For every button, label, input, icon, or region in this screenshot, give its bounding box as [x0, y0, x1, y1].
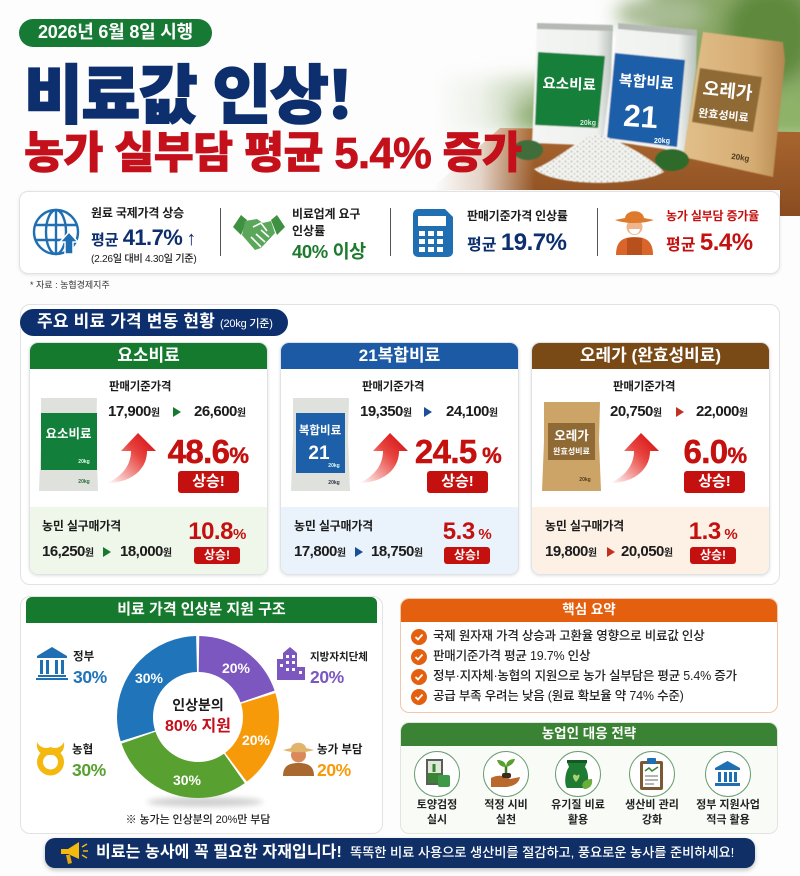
legend: local government: 20% — [310, 667, 344, 687]
arrow: farmer price — [607, 547, 615, 557]
title: 비료값 인상! — [24, 45, 351, 137]
card: slow-release — [531, 342, 770, 575]
strategy 3 label: 활용 — [568, 814, 588, 826]
banner message: 똑똑한 비료 사용으로 생산비를 절감하고, 풍요로운 농사를 준비하세요! — [350, 845, 734, 860]
strategy 2 label: 실천 — [496, 814, 516, 826]
strategy 4 icon: clipboard — [629, 751, 675, 797]
new price: 22,000원 — [696, 403, 748, 420]
panel: farmer strategy — [400, 722, 778, 834]
bag illustration: 21 — [308, 443, 330, 464]
card header: 요소비료 — [117, 346, 180, 365]
strategy 4 label: 생산비 관리 — [625, 799, 679, 811]
new price: 24,100원 — [446, 403, 498, 420]
heading: farmer strategy — [401, 723, 777, 746]
bag illustration: 20kg — [78, 459, 90, 465]
badge: farmer rise: 상승! — [454, 548, 480, 562]
stat: farmer burden: 농가 실부담 증가율 — [666, 209, 759, 223]
bag illustration: 복합비료 — [299, 423, 342, 437]
icon: megaphone — [60, 841, 89, 865]
arrow: farmer price — [355, 547, 363, 557]
hero illustration: fertilizer bags on wooden table: 오레가 — [702, 78, 754, 104]
hero illustration: fertilizer bags on wooden table — [441, 0, 800, 216]
percent increase: 48.6% — [168, 433, 248, 470]
legend: local government — [310, 651, 368, 687]
bag illustration: 완효성비료 — [553, 446, 591, 456]
heading: support structure — [26, 597, 377, 623]
stat: industry demand: 40% 이상 — [292, 241, 366, 262]
icon: handshake — [233, 215, 285, 250]
arrow: price direction — [676, 407, 684, 417]
date pill: 2026년 6월 8일 시행 — [38, 22, 193, 42]
percent increase: 24.5 % — [415, 433, 501, 470]
icon: globe — [32, 208, 80, 256]
strategy 5 label: 적극 활용 — [706, 814, 750, 826]
icon: farmer burden — [283, 741, 314, 776]
farmer old price: 16,250원 — [42, 543, 94, 560]
legend: farmer share: 농가 부담 — [317, 744, 363, 756]
hero illustration: fertilizer bags on wooden table: 복합비료 — [618, 72, 675, 93]
label: farmer price: 농민 실구매가격 — [42, 519, 121, 533]
badge: farmer rise — [690, 547, 736, 564]
new price: 26,600원 — [194, 403, 246, 420]
strategy 1 label — [404, 798, 470, 828]
farmer old price: 19,800원 — [545, 543, 597, 560]
hero illustration: fertilizer bags on wooden table: 20kg — [580, 120, 596, 127]
donut chart — [117, 636, 279, 810]
divider — [597, 208, 598, 256]
card: urea — [29, 342, 268, 575]
strategy 3 icon: organic fertilizer — [555, 751, 601, 797]
strategy 1 label: 토양검정 — [417, 799, 457, 811]
badge: rise — [178, 471, 239, 493]
panel: support structure — [20, 596, 383, 834]
farmer percent: 1.3 % — [689, 518, 737, 545]
bag illustration: 20kg — [78, 479, 90, 485]
card header — [30, 343, 267, 369]
stat: industry demand: 비료업계 요구 — [292, 207, 360, 221]
strategy 5 icon: bank — [705, 751, 751, 797]
footnote: ※ 농가는 인상분의 20%만 부담 — [126, 814, 270, 826]
farmer price panel — [281, 507, 518, 576]
green bag — [532, 23, 613, 146]
bottom banner — [45, 838, 755, 868]
card header — [532, 343, 769, 369]
stat: industry demand — [292, 207, 366, 262]
stat: farmer burden: 평균 5.4% — [666, 229, 753, 256]
label: base price: 판매기준가격 — [362, 381, 424, 393]
icon: farmer — [615, 211, 654, 255]
label: base price: 판매기준가격 — [109, 381, 171, 393]
arrow: farmer price — [103, 547, 111, 557]
legend: cooperative: 30% — [72, 760, 106, 780]
farmer new price: 18,750원 — [371, 543, 423, 560]
divider — [390, 208, 391, 256]
donut chart: 20% — [242, 732, 271, 748]
legend: farmer share: 20% — [317, 760, 351, 780]
icon: city hall — [277, 647, 305, 680]
legend: local government: 지방자치단체 — [310, 651, 368, 663]
farmer new price: 20,050원 — [621, 543, 673, 560]
bag illustration: 20kg — [328, 463, 340, 469]
icon: bank — [36, 647, 68, 680]
heading: farmer strategy: 농업인 대응 전략 — [542, 726, 636, 741]
heading: key summary: 핵심 요약 — [562, 602, 616, 617]
badge: rise — [427, 471, 488, 493]
badge: farmer rise — [444, 547, 490, 564]
farmer new price: 18,000원 — [120, 543, 172, 560]
strategy 3 label: 유기질 비료 — [551, 799, 605, 811]
donut chart: 인상분의 — [172, 697, 224, 713]
heading: key summary — [401, 599, 777, 622]
stat: industry demand: 인상률 — [292, 224, 325, 238]
farmer price panel — [532, 507, 769, 576]
icon: NH cooperative — [36, 742, 64, 776]
panel: key stats — [19, 191, 780, 274]
bag illustration: 요소비료 — [45, 427, 92, 441]
farmer price panel — [30, 507, 267, 576]
legend: government: 정부 — [73, 651, 94, 663]
legend: cooperative — [72, 743, 106, 780]
strategy 3 label — [545, 798, 611, 828]
bag illustration: 오레가 — [554, 428, 589, 443]
legend: government — [73, 650, 107, 687]
label: farmer price: 농민 실구매가격 — [294, 519, 373, 533]
donut chart: 80% 지원 — [165, 717, 231, 735]
strategy 2 icon: seedling in hand — [483, 751, 529, 797]
hero illustration: fertilizer bags on wooden table: 20kg — [654, 138, 670, 145]
stat: base price increase — [467, 209, 568, 256]
bag illustration — [542, 402, 601, 491]
label: farmer price: 농민 실구매가격 — [545, 519, 624, 533]
strategy 2 label: 적정 시비 — [484, 799, 528, 811]
strategy 1 icon: soil test — [414, 751, 460, 797]
fertilizer pile — [534, 134, 664, 183]
badge: farmer rise: 상승! — [204, 548, 230, 562]
stat: base price increase: 평균 19.7% — [467, 229, 566, 256]
heading: support structure: 비료 가격 인상분 지원 구조 — [117, 601, 286, 618]
hero illustration: fertilizer bags on wooden table: 21 — [622, 98, 659, 135]
bag illustration: 20kg — [328, 480, 340, 486]
badge: rise: 상승! — [192, 473, 225, 490]
donut chart: 30% — [135, 670, 164, 686]
farmer percent: 5.3 % — [443, 518, 491, 545]
farmer percent: 10.8% — [188, 518, 246, 545]
banner headline: 비료는 농사에 꼭 필요한 자재입니다! — [96, 844, 342, 861]
stat: raw material price: 원료 국제가격 상승 — [91, 206, 184, 220]
summary item 2: 판매기준가격 평균 19.7% 인상 — [433, 649, 590, 663]
badge: rise — [684, 471, 745, 493]
card header: 오레가 (완효성비료) — [580, 346, 721, 365]
legend: cooperative: 농협 — [72, 744, 93, 756]
panel: key summary — [400, 598, 778, 713]
bag illustration: 20kg — [579, 477, 591, 483]
donut chart: 20% — [222, 660, 251, 676]
date pill — [19, 19, 212, 47]
farmer old price: 17,800원 — [294, 543, 346, 560]
label: base price: 판매기준가격 — [613, 381, 675, 393]
panel: price changes — [20, 304, 780, 585]
badge: rise: 상승! — [441, 473, 474, 490]
source note: * 자료 : 농협경제지주 — [30, 280, 110, 290]
card: compound — [280, 342, 519, 575]
summary item 4: 공급 부족 우려는 낮음 (원료 확보율 약 74% 수준) — [433, 689, 684, 703]
bag illustration — [291, 398, 350, 491]
hero illustration: fertilizer bags on wooden table: 완효성비료 — [698, 106, 749, 125]
base prices: 19,350원 — [360, 403, 412, 420]
donut chart: 30% — [173, 772, 202, 788]
strategy 4 label: 강화 — [642, 814, 662, 826]
summary item 3: 정부·지자체·농협의 지원으로 농가 실부담은 평균 5.4% 증가 — [433, 669, 737, 683]
base prices: 20,750원 — [610, 403, 662, 420]
tan bag — [683, 32, 785, 177]
strategy 4 label — [619, 798, 685, 828]
percent increase: 6.0% — [683, 433, 747, 470]
blue bag — [603, 23, 697, 152]
badge: rise: 상승! — [698, 473, 731, 490]
card header: 21복합비료 — [359, 346, 440, 365]
arrow: price direction — [424, 407, 432, 417]
subtitle: 농가 실부담 평균 5.4% 증가 — [24, 130, 521, 178]
stat: base price increase: 판매기준가격 인상률 — [467, 209, 568, 223]
icon: calculator — [413, 209, 453, 257]
bag illustration — [39, 398, 98, 491]
icon: rising arrow — [612, 433, 659, 483]
hero illustration: fertilizer bags on wooden table: 요소비료 — [542, 75, 596, 94]
hero illustration: fertilizer bags on wooden table: 20kg — [731, 152, 750, 163]
strategy 1 label: 실시 — [427, 814, 447, 826]
strategy 2 label — [473, 798, 539, 828]
divider — [220, 208, 221, 256]
check icon — [411, 629, 427, 705]
stat: raw material price: 평균 41.7% ↑ — [91, 225, 196, 250]
legend: farmer share — [317, 743, 365, 781]
stat: raw material price: (2.26일 대비 4.30일 기준) — [91, 254, 196, 265]
strategy 5 label — [688, 798, 768, 828]
badge: farmer rise — [194, 547, 240, 564]
stat: farmer burden — [666, 209, 759, 256]
card header — [281, 343, 518, 369]
icon: rising arrow — [109, 433, 156, 483]
badge: farmer rise: 상승! — [700, 548, 726, 562]
section heading: price changes — [20, 309, 288, 336]
strategy 5 label: 정부 지원사업 — [696, 799, 760, 811]
stat: raw material price — [91, 206, 196, 265]
icon: rising arrow — [361, 433, 408, 483]
base prices: 17,900원 — [108, 403, 160, 420]
section heading: price changes: 주요 비료 가격 변동 현황 (20kg 기준) — [37, 312, 273, 331]
arrow: price direction — [173, 407, 181, 417]
summary item 1: 국제 원자재 가격 상승과 고환율 영향으로 비료값 인상 — [433, 629, 705, 643]
legend: government: 30% — [73, 667, 107, 687]
summary checks — [411, 628, 427, 706]
